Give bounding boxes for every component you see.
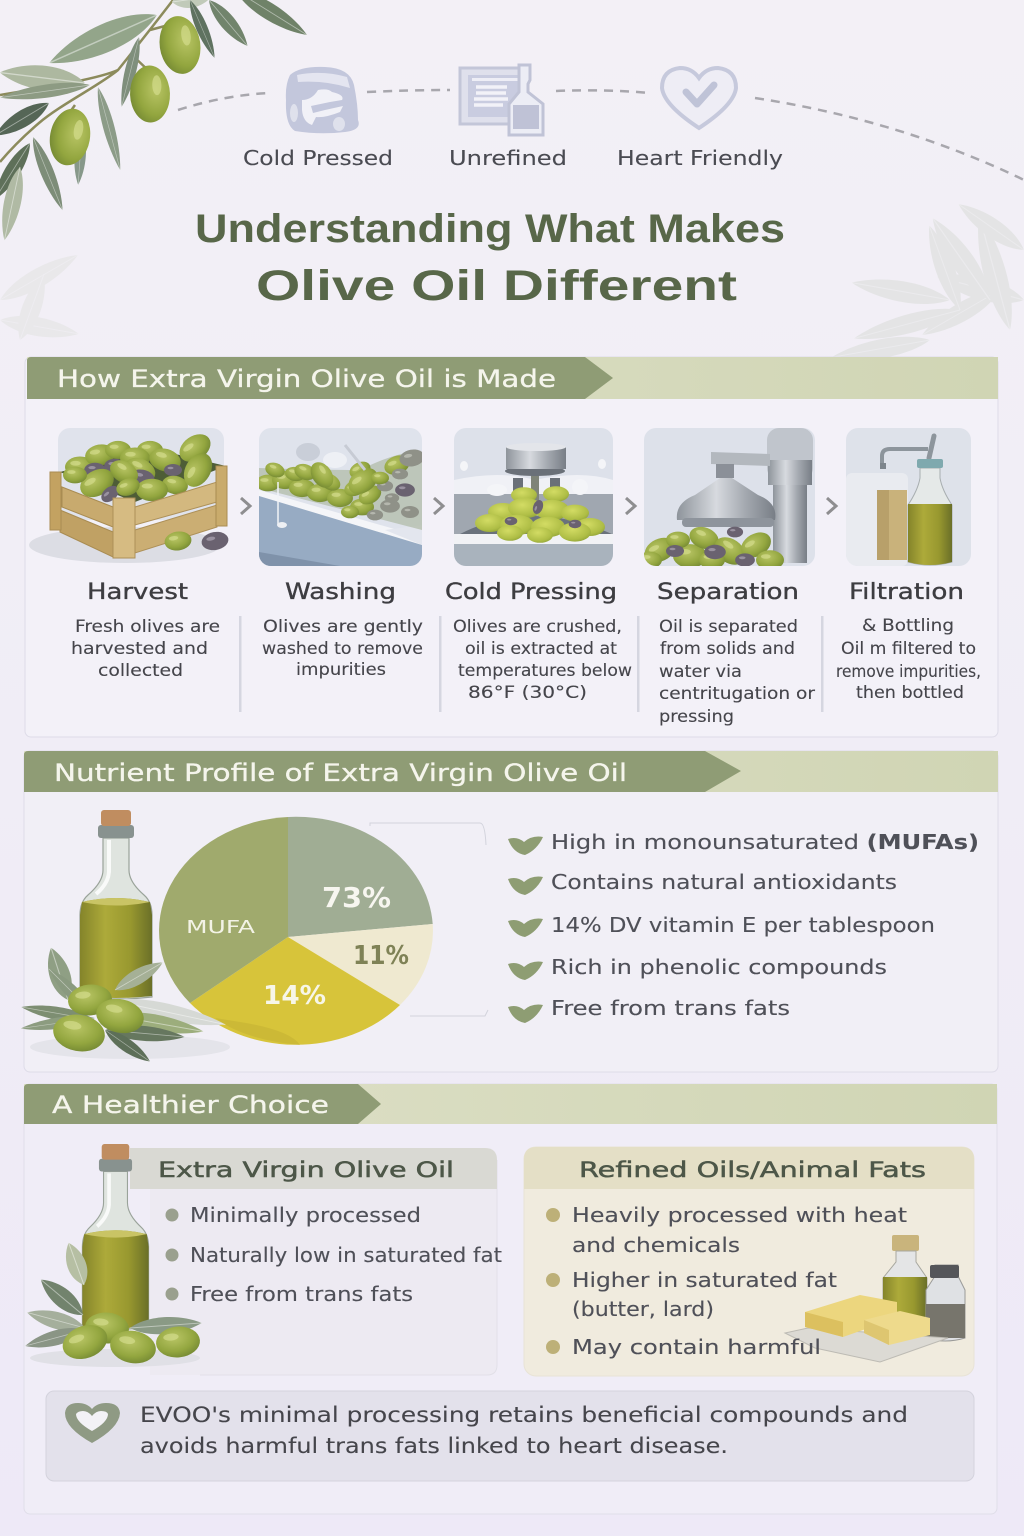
- description: collected: [98, 661, 183, 681]
- description: Olives are crushed,: [453, 617, 622, 637]
- card: refined oils and animal fats: and chemicals: [572, 1233, 740, 1257]
- description: washed to remove: [262, 639, 423, 659]
- arrow 4: [827, 498, 836, 514]
- pie chart: MUFA: [186, 917, 256, 938]
- label: Unrefined: [449, 146, 567, 170]
- label: Cold Pressed: [243, 146, 393, 170]
- title: [195, 207, 785, 310]
- illustration: washing olives: [256, 428, 426, 566]
- step: harvest: [29, 428, 230, 681]
- arrow 1: [241, 498, 250, 514]
- description: [71, 617, 220, 681]
- description: centritugation or: [659, 684, 815, 704]
- description: [659, 617, 815, 727]
- description: then bottled: [856, 683, 964, 703]
- panel: a healthier choice: [23, 1084, 997, 1514]
- icon: document and bottle: [460, 65, 543, 135]
- card: refined oils and animal fats: Heavily processed with heat: [572, 1203, 907, 1227]
- panel: how extra virgin olive oil is made: [25, 357, 998, 737]
- faint background leaves right: [830, 196, 1024, 367]
- description: water via: [659, 662, 742, 682]
- description: [262, 617, 423, 680]
- section header: A Healthier Choice: [52, 1091, 329, 1119]
- item 5: Free from trans fats: [551, 996, 790, 1020]
- heading: Cold Pressing: [445, 580, 617, 605]
- section header: [24, 751, 998, 792]
- callout text: EVOO's minimal processing retains beneficial compounds and: [140, 1403, 908, 1427]
- pie chart: [159, 817, 433, 1045]
- illustration: bottles and butter: [785, 1235, 965, 1362]
- title: Understanding What Makes: [195, 207, 785, 251]
- description: Oil m filtered to: [841, 639, 976, 659]
- description: [453, 617, 632, 703]
- badge: unrefined: [449, 65, 567, 170]
- card: refined oils and animal fats: Refined Oils/Animal Fats: [579, 1158, 926, 1182]
- illustration: press: [454, 428, 613, 566]
- title: Olive Oil Different: [256, 262, 737, 310]
- faint background leaves left: [0, 247, 83, 343]
- olive branch top left: [0, 0, 312, 242]
- callout text: avoids harmful trans fats linked to heart disease.: [140, 1434, 728, 1458]
- item 4: Rich in phenolic compounds: [551, 955, 887, 979]
- badge: cold pressed: [243, 67, 393, 170]
- illustration: filter and bottle: [846, 428, 971, 566]
- heading: Harvest: [87, 580, 188, 605]
- icon: heart with check: [662, 68, 736, 128]
- description: & Bottling: [862, 616, 954, 636]
- description: impurities: [296, 660, 386, 680]
- item 3: 14% DV vitamin E per tablespoon: [551, 913, 935, 937]
- description: [836, 616, 981, 703]
- callout: [46, 1391, 974, 1481]
- illustration: bottle with olives: [20, 810, 230, 1067]
- heading: Washing: [285, 580, 396, 605]
- step: separation: [638, 428, 815, 727]
- badge: heart friendly: [617, 68, 783, 170]
- callout text: [140, 1403, 908, 1458]
- card: refined oils and animal fats: [524, 1147, 974, 1376]
- step: cold pressing: [445, 428, 632, 703]
- icon: cold pressed block: [286, 67, 359, 133]
- arrow 2: [434, 498, 443, 514]
- description: 86°F (30°C): [468, 683, 587, 703]
- description: Olives are gently: [263, 617, 423, 637]
- dashed arc line: [178, 90, 1024, 180]
- step: filtration: [836, 428, 981, 703]
- card: extra virgin olive oil: Extra Virgin Olive Oil: [158, 1158, 454, 1182]
- faint chart bracket: [370, 823, 488, 1016]
- section header: Nutrient Profile of Extra Virgin Olive Oil: [54, 759, 627, 787]
- card: refined oils and animal fats: May contain harmful: [572, 1335, 821, 1359]
- card: extra virgin olive oil: Minimally processed: [190, 1203, 421, 1227]
- arrow 3: [626, 498, 635, 514]
- card: refined oils and animal fats: Higher in saturated fat: [572, 1268, 837, 1292]
- card: extra virgin olive oil: [23, 1144, 502, 1375]
- step: washing: [256, 428, 426, 680]
- pie chart: 73%: [322, 881, 391, 914]
- description: Fresh olives are: [75, 617, 220, 637]
- description: oil is extracted at: [465, 639, 617, 659]
- description: from solids and: [660, 639, 795, 659]
- card: extra virgin olive oil: Free from trans fats: [190, 1282, 413, 1306]
- panel: nutrient profile: [20, 751, 998, 1072]
- description: temperatures below: [458, 661, 632, 681]
- section header: [27, 357, 998, 399]
- description: pressing: [659, 707, 734, 727]
- benefits list: [508, 830, 979, 1023]
- description: harvested and: [71, 639, 208, 659]
- icon: heart: [65, 1403, 120, 1443]
- section header: [24, 1084, 997, 1124]
- item 1: High in monounsaturated (MUFAs): [551, 830, 979, 854]
- heading: Separation: [657, 580, 799, 605]
- description: remove impurities,: [836, 662, 981, 682]
- illustration: centrifuge: [638, 428, 815, 570]
- pie chart: 11%: [353, 941, 409, 971]
- pie chart: 14%: [263, 981, 326, 1011]
- heading: Filtration: [849, 580, 964, 605]
- item 2: Contains natural antioxidants: [551, 870, 897, 894]
- card: extra virgin olive oil: Naturally low in saturated fat: [190, 1243, 502, 1267]
- section header: How Extra Virgin Olive Oil is Made: [57, 365, 556, 393]
- illustration: bottle with olives: [23, 1144, 202, 1367]
- label: Heart Friendly: [617, 146, 783, 170]
- description: Oil is separated: [659, 617, 798, 637]
- illustration: crate of olives: [29, 428, 230, 570]
- card: refined oils and animal fats: (butter, lard): [572, 1297, 714, 1321]
- item 5: [508, 996, 790, 1023]
